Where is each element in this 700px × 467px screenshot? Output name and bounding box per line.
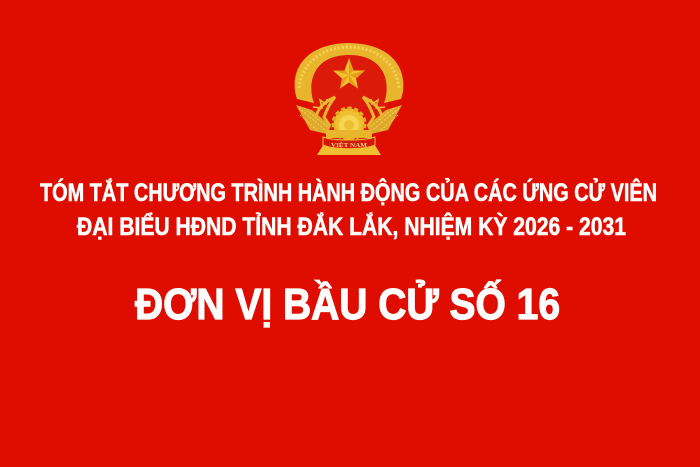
emblem right rice sheaf [363, 97, 402, 134]
emblem red disc [309, 54, 389, 134]
emblem wreath ring [295, 43, 403, 103]
emblem ribbon: VIỆT NAM [331, 141, 367, 149]
emblem left rice sheaf [296, 97, 335, 134]
emblem star [333, 58, 365, 88]
constituency title: ĐƠN VỊ BẦU CỬ SỐ 16 [135, 278, 560, 329]
emblem cogwheel [326, 108, 372, 140]
icon: Vietnam national emblem [295, 43, 403, 155]
